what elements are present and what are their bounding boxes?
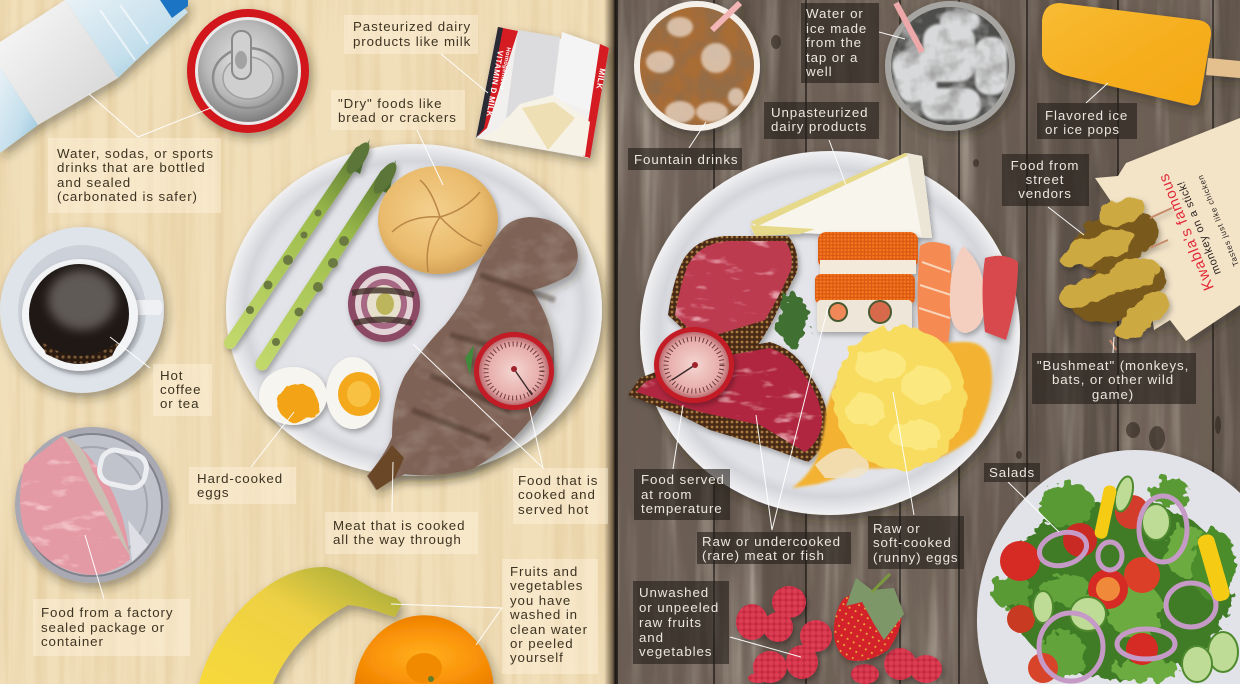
plate: salad — [977, 450, 1240, 684]
label: salads: Salads — [989, 465, 1035, 480]
label: hard-cooked eggs: Hard-cooked — [197, 471, 283, 486]
label: dry foods — [331, 90, 465, 130]
label: bottled drinks: drinks that are bottled — [57, 160, 206, 175]
label: cooked and served hot: cooked and — [518, 487, 596, 502]
icon: hard-cooked eggs — [259, 357, 380, 429]
label: hard-cooked eggs: eggs — [197, 485, 229, 500]
label: raw meat or fish: (rare) meat or fish — [702, 548, 825, 563]
label: cooked and served hot: served hot — [518, 502, 589, 517]
label: bottled drinks: and sealed — [57, 175, 131, 190]
label: unpasteurized dairy: Unpasteurized — [771, 105, 868, 120]
label: unwashed produce: raw fruits — [639, 615, 702, 630]
label: tap water or ice: well — [805, 64, 833, 79]
label: tap water or ice: tap or a — [806, 50, 858, 65]
plate: safe meal — [226, 139, 602, 490]
label: factory sealed food: sealed package or — [41, 620, 165, 635]
leader lines: safe foods — [85, 54, 543, 645]
icon: milk carton — [476, 27, 609, 158]
label: runny eggs — [868, 516, 964, 569]
label: tap water or ice: ice made — [806, 21, 867, 36]
label: flavored ice — [1037, 103, 1137, 139]
label: washed fruits and vegetables — [502, 559, 598, 674]
label: washed fruits and vegetables: you have — [510, 593, 571, 608]
label: unpasteurized dairy — [764, 102, 879, 139]
label: hot coffee or tea: Hot — [160, 368, 183, 383]
icon: coffee cup on saucer — [0, 227, 164, 393]
icon: street food paper bag with satay: Tastes just like chicken — [1196, 173, 1240, 268]
label: unwashed produce: Unwashed — [639, 585, 709, 600]
icon: opened tuna can — [15, 427, 169, 583]
label: raw meat or fish: Raw or undercooked — [702, 534, 841, 549]
label: bushmeat: "Bushmeat" (monkeys, — [1037, 358, 1189, 373]
icon: street food paper bag with satay: monkey on a stick! — [1175, 179, 1224, 276]
label: street vendors — [1002, 154, 1089, 206]
label: washed fruits and vegetables: vegetables — [510, 578, 583, 593]
label: room temperature food: temperature — [641, 501, 723, 516]
label: bottled drinks: (carbonated is safer) — [57, 189, 198, 204]
leader lines: unsafe foods — [673, 32, 1114, 657]
label: washed fruits and vegetables: Fruits and — [510, 564, 578, 579]
label: factory sealed food: container — [41, 634, 104, 649]
icon: strawberry — [834, 574, 904, 661]
icon: ice pop — [1042, 3, 1240, 105]
label: tap water or ice: Water or — [806, 6, 864, 21]
label: unwashed produce: and — [639, 630, 664, 645]
label: street vendors: street — [1026, 172, 1064, 187]
label: unwashed produce: vegetables — [639, 644, 712, 659]
icon: milk carton: Homogenized — [498, 47, 511, 90]
label: factory sealed food: Food from a factory — [41, 605, 173, 620]
icon: brie cheese wedge — [750, 153, 932, 238]
label: cooked meat — [325, 512, 478, 554]
icon: orange — [354, 615, 494, 684]
label: runny eggs: (runny) eggs — [873, 550, 958, 565]
icon: asparagus spears — [230, 139, 401, 364]
icon: milk carton: VITAMIN D MILK — [484, 50, 505, 118]
label: factory sealed food — [33, 599, 190, 656]
icon: salad leaves — [992, 478, 1236, 682]
label: hot coffee or tea: or tea — [160, 396, 199, 411]
background: light wood table (safe foods) — [0, 0, 620, 684]
icon: monkey meat satay skewers — [1055, 192, 1175, 350]
icon: meat thermometer — [465, 332, 554, 410]
label: pasteurized dairy: products like milk — [353, 34, 471, 49]
label: bushmeat: bats, or other wild — [1052, 372, 1174, 387]
icon: milk carton: MILK — [594, 68, 607, 90]
label: washed fruits and vegetables: yourself — [510, 650, 564, 665]
label: dry foods: bread or crackers — [338, 110, 457, 125]
icon: thermometer at room temperature — [654, 327, 734, 403]
label: fountain drinks: Fountain drinks — [634, 152, 738, 167]
label: runny eggs: soft-cooked — [873, 535, 952, 550]
label: washed fruits and vegetables: clean water — [510, 622, 588, 637]
label: bushmeat: game) — [1092, 387, 1134, 402]
label: cooked meat: Meat that is cooked — [333, 518, 465, 533]
icon: raspberries and strawberry — [736, 574, 942, 684]
label: runny eggs: Raw or — [873, 521, 921, 536]
plate: unsafe meal — [628, 151, 1020, 515]
icon: grilled onion slice — [348, 266, 420, 342]
label: hot coffee or tea — [153, 364, 212, 416]
label: washed fruits and vegetables: or peeled — [510, 636, 574, 651]
label: bottled drinks: Water, sodas, or sports — [57, 146, 214, 161]
label: tap water or ice: from the — [806, 35, 862, 50]
label: raw meat or fish — [697, 532, 851, 564]
label: pasteurized dairy — [344, 15, 478, 54]
icon: raw sushi rolls and nigiri — [815, 232, 1018, 345]
label: salads — [984, 463, 1040, 482]
label: pasteurized dairy: Pasteurized dairy — [353, 19, 471, 34]
label: hot coffee or tea: coffee — [160, 382, 201, 397]
label: cooked and served hot: Food that is — [518, 473, 598, 488]
label: unwashed produce — [633, 581, 729, 664]
icon: tomatoes — [1000, 495, 1160, 683]
icon: banana — [199, 567, 402, 684]
background: dark wood planks (unsafe foods) — [618, 0, 1240, 684]
label: room temperature food: Food served — [641, 472, 725, 487]
icon: grilled steak — [367, 217, 578, 490]
icon: parsley garnish — [778, 293, 808, 347]
icon: bread roll — [378, 166, 498, 274]
label: cooked and served hot — [513, 468, 608, 524]
label: unpasteurized dairy: dairy products — [771, 119, 867, 134]
icon: cucumber slices — [1033, 475, 1238, 682]
label: bottled drinks — [48, 138, 221, 213]
icon: rare peppered beef — [628, 236, 828, 462]
label: room temperature food — [634, 469, 730, 520]
icon: fountain drink cup — [634, 1, 760, 131]
icon: water bottle — [0, 0, 188, 153]
label: hard-cooked eggs — [189, 467, 296, 504]
icon: red onion rings — [1036, 496, 1216, 681]
label: flavored ice: or ice pops — [1045, 122, 1120, 137]
label: cooked meat: all the way through — [333, 532, 462, 547]
label: flavored ice: Flavored ice — [1045, 108, 1128, 123]
label: street vendors: Food from — [1011, 158, 1079, 173]
label: fountain drinks — [628, 148, 742, 170]
label: unwashed produce: or unpeeled — [639, 600, 719, 615]
icon: yellow pepper strips — [1094, 484, 1231, 603]
icon: glass of ice water — [885, 1, 1015, 131]
icon: runny scrambled eggs — [792, 326, 992, 488]
label: street vendors: vendors — [1018, 186, 1072, 201]
label: dry foods: "Dry" foods like — [338, 96, 442, 111]
icon: soda can top — [187, 9, 309, 133]
label: room temperature food: at room — [641, 487, 692, 502]
icon: street food paper bag with satay — [1055, 118, 1240, 350]
icon: street food paper bag with satay: Kwabla's famous — [1155, 171, 1218, 293]
label: bushmeat — [1032, 353, 1196, 404]
label: tap water or ice — [801, 3, 879, 83]
label: washed fruits and vegetables: washed in — [509, 607, 578, 622]
